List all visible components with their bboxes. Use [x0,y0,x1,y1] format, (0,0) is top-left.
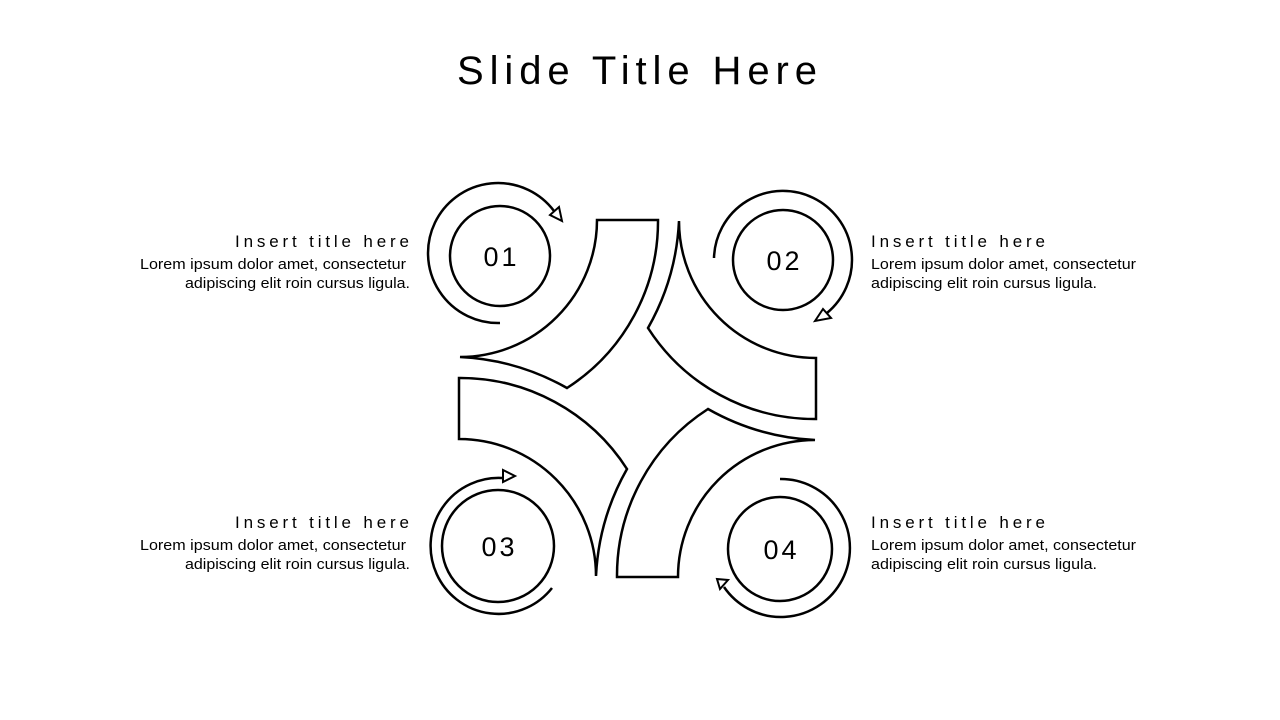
arrow: cycle 02 [714,191,852,313]
arrow: cycle 03 [431,478,552,614]
text block 04: Insert title here [871,513,1045,532]
text block 04 [871,513,1136,573]
text block 02: Insert title here [871,232,1045,251]
segment: top-left [460,220,658,388]
text block 02 [871,232,1136,292]
step 04: 04 [764,535,796,565]
text block 03: Insert title here [235,513,409,532]
step 04 [717,479,850,617]
text block 04: Lorem ipsum dolor amet, consectetur [871,537,1136,554]
text block 03: adipiscing elit roin cursus ligula. [185,556,410,573]
text block 01: adipiscing elit roin cursus ligula. [185,275,410,292]
text block 04: adipiscing elit roin cursus ligula. [871,556,1097,573]
text block 01: Insert title here [235,232,409,251]
segment: bottom-right [617,409,815,577]
text block 03: Lorem ipsum dolor amet, consectetur [140,537,406,554]
text block 02: adipiscing elit roin cursus ligula. [871,275,1097,292]
text block 01 [140,232,410,292]
step 01: 01 [484,242,516,272]
step 03: 03 [482,532,514,562]
step 02: 02 [766,246,800,276]
arrow: cycle 04 [724,479,850,617]
arrow: cycle 01 [428,183,554,323]
text block 02: Lorem ipsum dolor amet, consectetur [871,256,1136,273]
segment: bottom-left [459,378,627,576]
step 03 [431,470,554,614]
step 02 [714,191,852,321]
text block 01: Lorem ipsum dolor amet, consectetur [140,256,406,273]
step 01 [428,183,562,323]
text block 03 [140,513,410,573]
segment: top-right [648,221,816,419]
title: Slide Title Here [457,49,817,93]
central diagram [459,220,816,577]
